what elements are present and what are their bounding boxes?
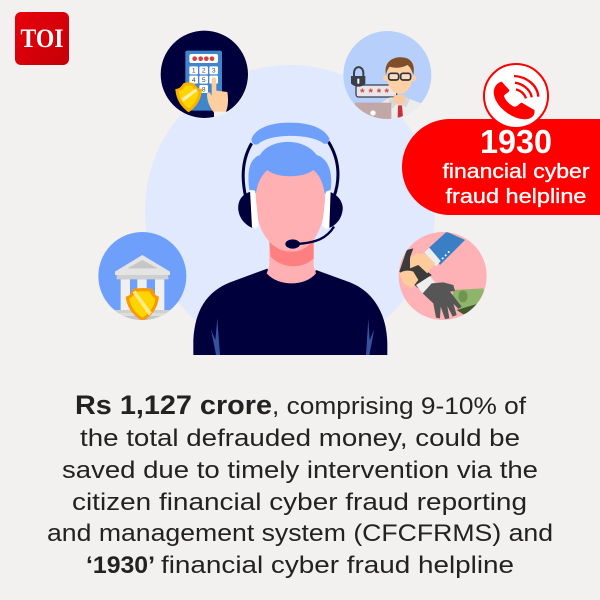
icon: keypad with shield: 5 <box>202 77 206 84</box>
icon: keypad with shield: 2 <box>202 68 206 75</box>
red pill <box>402 119 600 215</box>
face <box>256 170 325 252</box>
icon: keypad with shield: 6 <box>212 77 216 84</box>
main text block: Rs 1,127 crore <box>75 390 272 420</box>
icon: man with password lock: * <box>377 87 382 99</box>
icon: man with password lock <box>343 31 432 127</box>
icon: man with password lock: * <box>384 87 389 99</box>
headband pad <box>252 123 329 145</box>
main text block: the total defrauded money, could be <box>80 425 520 452</box>
main text block: citizen financial cyber fraud reporting <box>72 489 527 516</box>
microphone <box>285 239 300 249</box>
icon: keypad with shield: 3 <box>212 68 216 75</box>
right ear cup <box>329 192 343 228</box>
microphone boom <box>297 227 334 244</box>
headband arm <box>243 142 338 198</box>
logo: TOI: TOI <box>20 24 64 53</box>
main text block: and management system (CFCFRMS) and <box>47 520 553 547</box>
neck shadow <box>269 242 314 266</box>
shirt highlights <box>211 318 220 355</box>
icon: keypad with shield: 8 <box>202 86 206 93</box>
icon: bank with shield <box>98 232 186 321</box>
main text block: ‘1930’ <box>86 552 155 579</box>
helpline badge <box>402 64 600 215</box>
hair <box>248 142 331 193</box>
helpline label: financial cyber <box>442 160 590 183</box>
neck <box>267 240 316 283</box>
left ear cup <box>238 192 253 228</box>
icon: handshake with money <box>399 232 487 320</box>
icon: man with password lock: * <box>368 87 373 99</box>
icon: phone <box>484 64 548 128</box>
main text block <box>47 390 553 579</box>
icon: man with password lock: * <box>360 87 365 99</box>
helpline number: 1930 <box>480 123 552 160</box>
icon: keypad with shield <box>160 30 249 122</box>
main text block: saved due to timely intervention via the <box>62 457 538 484</box>
logo: TOI <box>15 12 69 65</box>
helpline label: fraud helpline <box>446 185 586 208</box>
helpline label <box>442 160 590 208</box>
main text block: , comprising 9-10% of <box>272 393 526 420</box>
agent illustration with headset <box>193 123 387 355</box>
main text block: financial cyber fraud helpline <box>161 552 514 579</box>
large background circle <box>145 65 435 355</box>
icon: keypad with shield: 1 <box>192 68 196 75</box>
icon: keypad with shield: 4 <box>192 77 196 84</box>
body <box>193 269 387 355</box>
